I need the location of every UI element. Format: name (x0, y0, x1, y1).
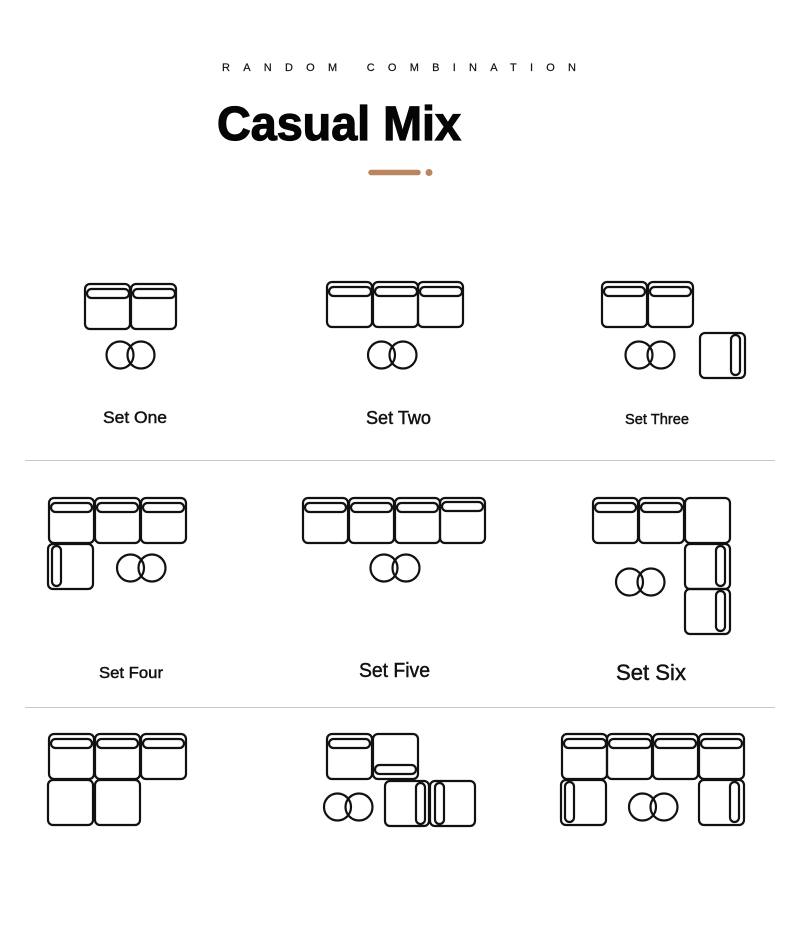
label: set six: Set Six (616, 660, 686, 685)
panel: set one (85, 284, 176, 368)
panel: set three (602, 282, 745, 378)
label: set one: Set One (103, 408, 167, 427)
panel: set eight (324, 734, 475, 826)
label: set two: Set Two (366, 408, 431, 428)
panel: set six (593, 498, 730, 634)
label: set four: Set Four (99, 665, 164, 682)
label: set five: Set Five (359, 660, 430, 682)
panel: set five (303, 498, 485, 582)
label: set three: Set Three (625, 411, 689, 428)
title: Casual Mix (217, 98, 461, 151)
eyebrow text: RANDOM COMBINATION (222, 62, 576, 74)
panel: set seven (48, 734, 186, 825)
panel: set four (48, 498, 186, 589)
accent bar and dot (371, 169, 432, 176)
panel: set nine (561, 734, 744, 825)
panel: set two (327, 282, 463, 368)
